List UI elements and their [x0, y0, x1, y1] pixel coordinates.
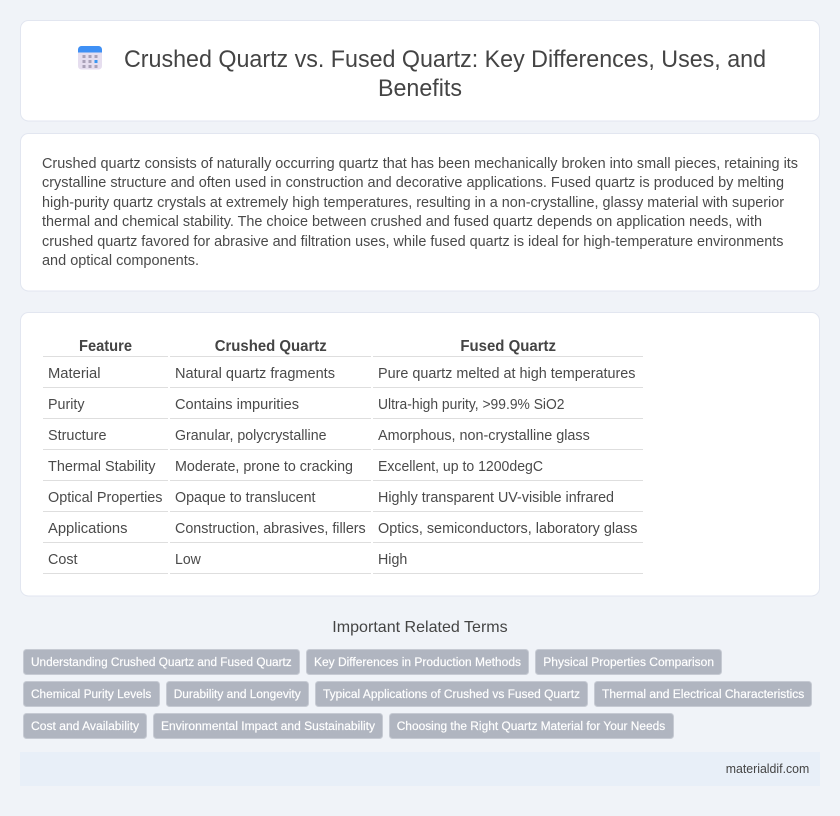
- table header: Fused Quartz: [460, 338, 556, 355]
- row: cost: Cost: [48, 552, 78, 568]
- row: material: Pure quartz melted at high temperatures: [378, 366, 636, 382]
- row: optical properties: [48, 490, 614, 506]
- row: structure: Structure: [48, 428, 106, 444]
- row: purity: Contains impurities: [175, 397, 299, 413]
- tag: Cost and Availability: [31, 719, 140, 733]
- row: applications: Optics, semiconductors, laboratory glass: [378, 521, 638, 537]
- table header: [79, 338, 556, 355]
- tag: [166, 682, 308, 706]
- row: thermal stability: Moderate, prone to cracking: [175, 459, 353, 475]
- tag: Environmental Impact and Sustainability: [161, 719, 376, 733]
- row: applications: Applications: [48, 521, 128, 537]
- panel: comparison table: [20, 312, 820, 596]
- title: Benefits: [378, 75, 462, 102]
- tag: [24, 682, 160, 706]
- footer: [20, 752, 820, 786]
- tag: [316, 682, 588, 706]
- table header: Crushed Quartz: [215, 338, 327, 355]
- row: optical properties: Opaque to translucent: [175, 490, 316, 506]
- text block: description: and optical components.: [42, 253, 199, 269]
- row: material: Material: [48, 366, 100, 382]
- row: thermal stability: Excellent, up to 1200degC: [378, 459, 543, 475]
- row: thermal stability: [48, 459, 543, 475]
- row: thermal stability: Thermal Stability: [48, 459, 156, 475]
- row: purity: [48, 397, 564, 413]
- row: optical properties: Highly transparent UV-visible infrared: [378, 490, 614, 506]
- footer: materialdif.com: [726, 762, 809, 776]
- text block: description: thermal and chemical stability. The choice between crushed and fused quartz depends on application needs, with: [42, 214, 762, 230]
- row: purity: Ultra-high purity, >99.9% SiO2: [378, 397, 564, 413]
- tag: Key Differences in Production Methods: [314, 655, 521, 669]
- tag: Typical Applications of Crushed vs Fused Quartz: [323, 687, 580, 701]
- row: purity: Purity: [48, 397, 85, 413]
- panel: summary paragraph: [20, 134, 820, 291]
- row: material: Natural quartz fragments: [175, 366, 335, 382]
- tag: [536, 650, 722, 674]
- row: optical properties: Optical Properties: [48, 490, 162, 506]
- text block: description: high-purity quartz crystals at extremely high temperatures, resulting in a non-crystalline, glassy material with superior: [42, 195, 784, 211]
- row: structure: Amorphous, non-crystalline glass: [378, 428, 590, 444]
- text block: description: [42, 156, 798, 269]
- tag: [306, 650, 528, 674]
- title: [124, 46, 766, 102]
- heading: important related terms: Important Related Terms: [332, 619, 508, 636]
- tag: Thermal and Electrical Characteristics: [602, 687, 804, 701]
- row: cost: High: [378, 552, 407, 568]
- tag: Physical Properties Comparison: [543, 655, 714, 669]
- text block: description: crushed quartz favored for abrasive and filtration uses, while fused quartz is ideal for high-temperature environments: [42, 234, 784, 250]
- tag: [594, 682, 812, 706]
- tag: Chemical Purity Levels: [31, 687, 151, 701]
- row: applications: Construction, abrasives, fillers: [175, 521, 366, 537]
- tag: [390, 714, 674, 738]
- panel: title header: [20, 20, 820, 121]
- text block: description: Crushed quartz consists of naturally occurring quartz that has been mechanically broken into small pieces, retaining its: [42, 156, 798, 172]
- row: structure: [48, 428, 590, 444]
- panel: related term tags: [24, 650, 812, 738]
- row: material: [48, 366, 636, 382]
- row: cost: [48, 552, 407, 568]
- tag: Understanding Crushed Quartz and Fused Quartz: [31, 655, 292, 669]
- tag: [154, 714, 382, 738]
- row: applications: [48, 521, 638, 537]
- icon: calendar grid: [78, 46, 102, 70]
- tag: [24, 714, 146, 738]
- text block: description: crystalline structure and often used in construction and decorative applications. Fused quartz is produced by melting: [42, 175, 784, 191]
- tag: [24, 650, 300, 674]
- title: Crushed Quartz vs. Fused Quartz: Key Differences, Uses, and: [124, 46, 766, 73]
- row: cost: Low: [175, 552, 201, 568]
- row: structure: Granular, polycrystalline: [175, 428, 326, 444]
- tag: Durability and Longevity: [174, 687, 302, 701]
- table header: Feature: [79, 338, 132, 355]
- tag: Choosing the Right Quartz Material for Your Needs: [397, 719, 665, 733]
